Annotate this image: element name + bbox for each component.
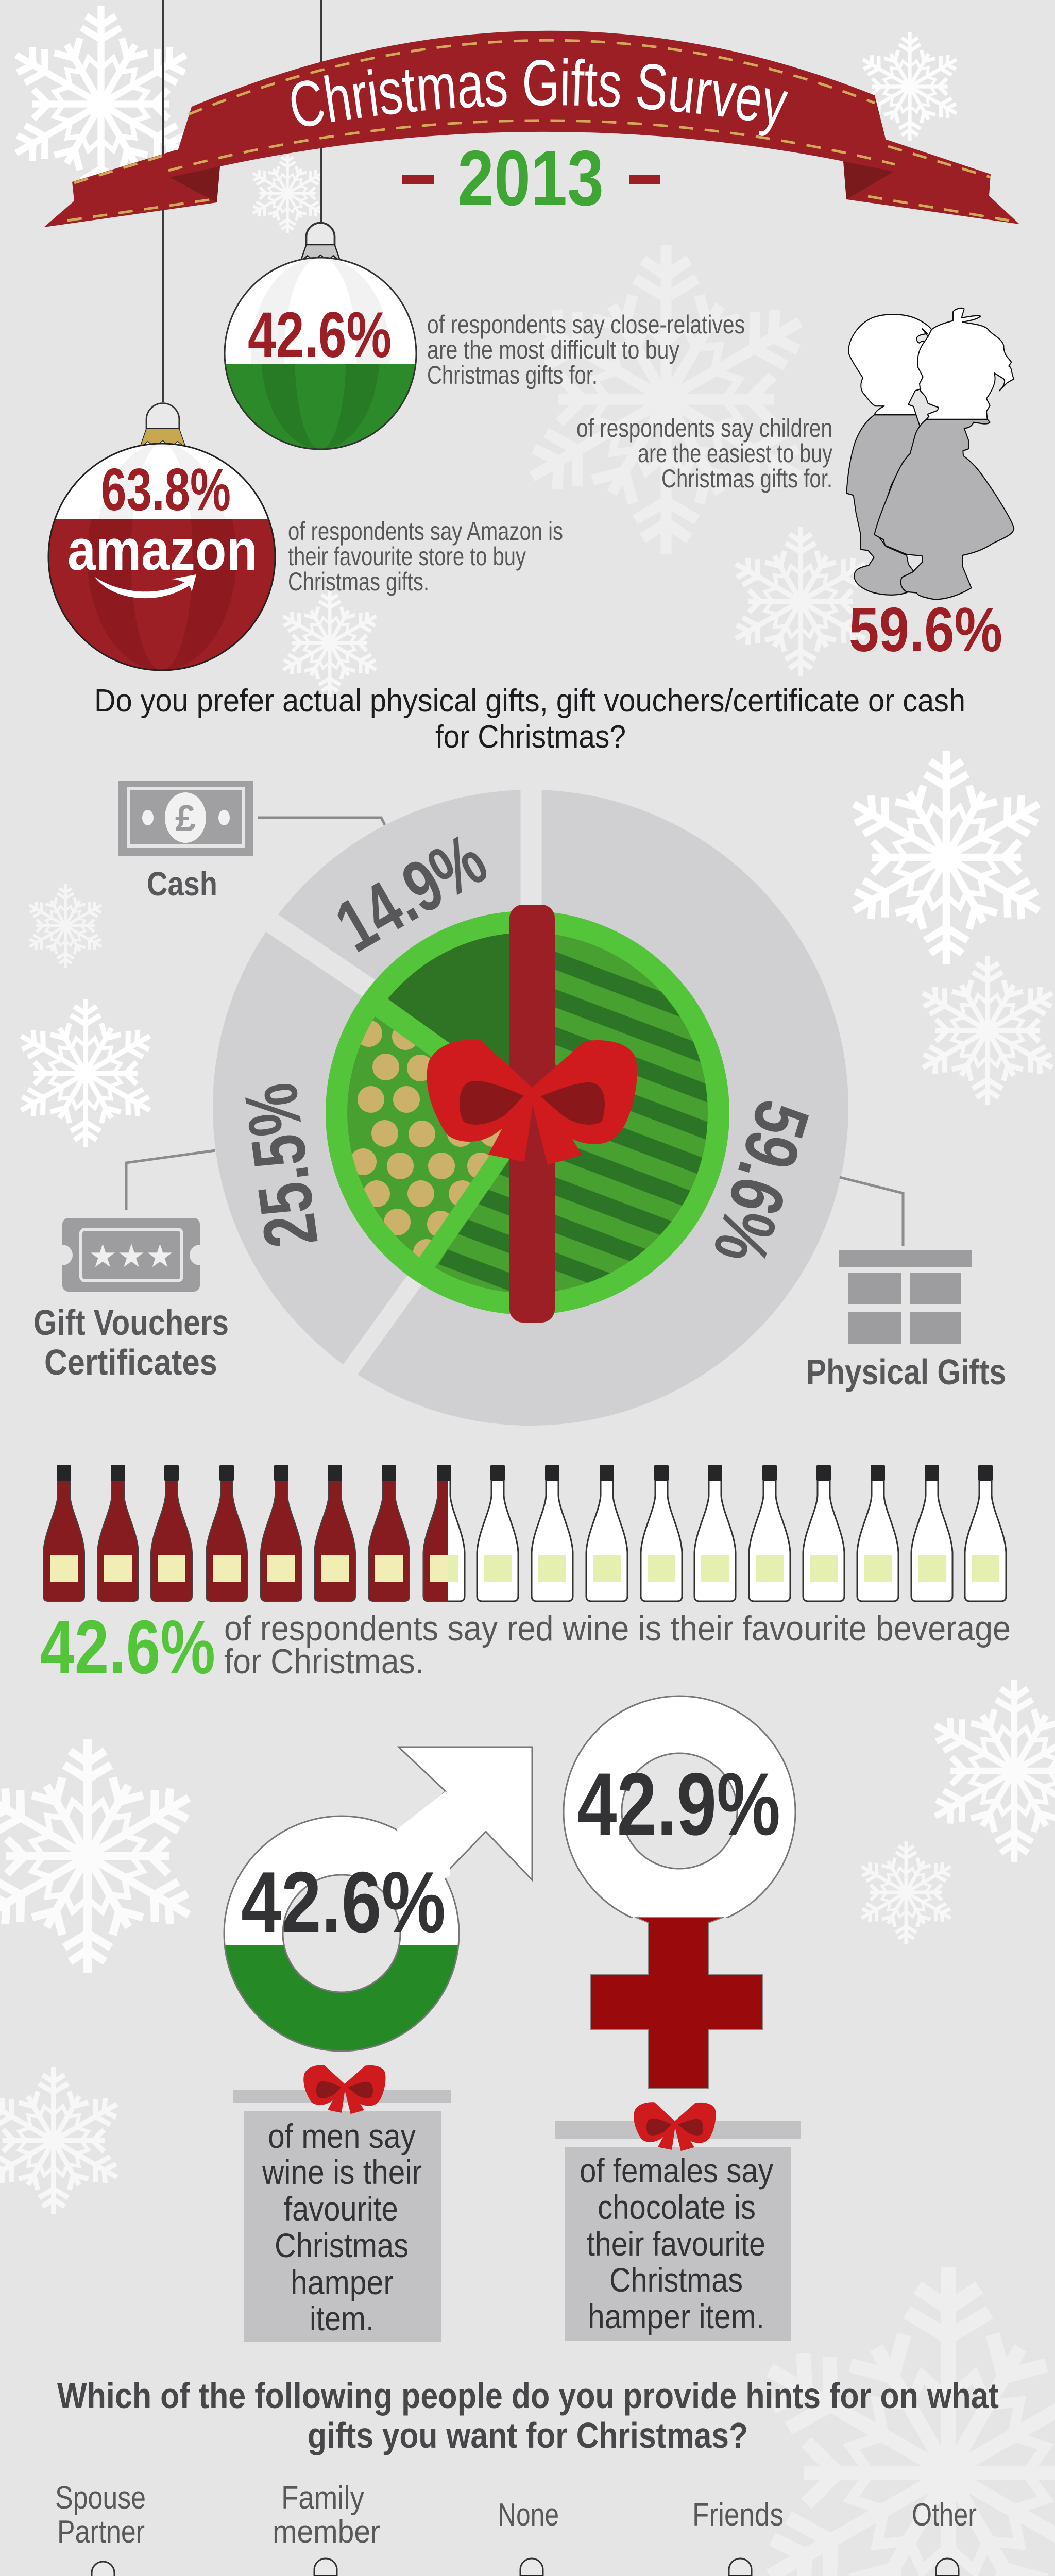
- label: physical gifts: Physical Gifts: [806, 1352, 1006, 1392]
- pie label: 59.6%: 59.6%: [697, 1092, 826, 1273]
- text: children: [576, 414, 832, 493]
- text: close relatives: Christmas gifts for.: [427, 361, 598, 389]
- question: gift preference: Do you prefer actual physical gifts, gift vouchers/certificate or cash: [94, 683, 965, 719]
- stat: red wine 42.6%: 42.6%: [40, 1605, 215, 1690]
- hamper card: females: their favourite: [587, 2225, 765, 2263]
- ornament: friends 10.6%: [667, 2497, 811, 2576]
- ornament: amazon 63.8%: 63.8%: [101, 456, 231, 523]
- hamper card: men: wine is their: [262, 2153, 422, 2191]
- pie label: 25.5%: 25.5%: [228, 1078, 334, 1252]
- hamper card: men: hamper: [291, 2263, 394, 2301]
- ornament: none 21.3%: None: [498, 2497, 559, 2533]
- pictogram: wine bottles: [43, 1465, 1006, 1601]
- hamper card: men: favourite: [284, 2190, 398, 2228]
- icon: gift voucher: [52, 1150, 215, 1292]
- icon: gift voucher: ★★★: [89, 1237, 174, 1275]
- ornament: family member 25.5%: [252, 2480, 396, 2576]
- hamper card: men: item.: [310, 2299, 374, 2337]
- hamper card: females: chocolate is: [598, 2188, 756, 2226]
- text: close relatives: are the most difficult to buy: [427, 335, 679, 364]
- hamper card: females: of females say: [580, 2151, 773, 2190]
- question: hints: [57, 2376, 999, 2455]
- ornament: other 4.3%: [875, 2497, 1019, 2576]
- question: hints: gifts you want for Christmas?: [308, 2415, 748, 2455]
- ornament: close relatives 42.6%: [225, 223, 416, 449]
- hamper card: men: Christmas: [275, 2226, 409, 2264]
- title banner: [44, 31, 1019, 227]
- female symbol chart: [564, 1696, 795, 2089]
- text: red wine: of respondents say red wine is their favourite beverage: [224, 1609, 1011, 1648]
- label: cash: Cash: [147, 865, 217, 903]
- ornament: family member 25.5%: Family: [281, 2480, 364, 2516]
- label: gift vouchers: [33, 1302, 229, 1382]
- hamper card: men: of men say: [268, 2117, 416, 2155]
- hamper card: females: [555, 2102, 801, 2341]
- text: red wine: [224, 1609, 1011, 1681]
- gift illustration: [326, 905, 729, 1323]
- ornament: spouse partner 38.3%: [32, 2480, 176, 2576]
- text: children: Christmas gifts for.: [661, 464, 832, 493]
- ornament: spouse partner 38.3%: Spouse: [55, 2480, 146, 2516]
- year heading: [402, 134, 660, 222]
- male symbol chart: [224, 1747, 532, 2051]
- icon: cash: £: [175, 798, 196, 839]
- ornament: none 21.3%: [460, 2497, 604, 2576]
- hamper card: females: Christmas: [609, 2261, 743, 2299]
- text: amazon: [288, 517, 563, 596]
- text: amazon: their favourite store to buy: [288, 542, 526, 571]
- ornament: family member 25.5%: member: [273, 2514, 380, 2550]
- chart: gift preference pie: [213, 773, 848, 1426]
- icon: physical gift: [839, 1177, 972, 1344]
- question: gift preference: [94, 683, 965, 755]
- icon: two children: [846, 308, 1014, 599]
- ornament: spouse partner 38.3%: Partner: [57, 2514, 145, 2550]
- text: close relatives: [427, 310, 745, 389]
- pie label: 14.9%: 14.9%: [322, 818, 500, 968]
- title text: Christmas Gifts Survey: [292, 58, 788, 136]
- ornament: other 4.3%: Other: [912, 2497, 977, 2533]
- hanging strings: [163, 0, 321, 402]
- text: amazon: Christmas gifts.: [288, 567, 429, 596]
- hamper card: females: hamper item.: [588, 2297, 764, 2335]
- text: children: of respondents say children: [576, 414, 832, 443]
- text: close relatives: of respondents say close-relatives: [427, 310, 745, 339]
- label: gift vouchers: Certificates: [44, 1342, 217, 1382]
- ornament: friends 10.6%: Friends: [692, 2497, 784, 2533]
- year heading: 2013: [457, 134, 604, 222]
- text: children: are the easiest to buy: [638, 439, 832, 468]
- hamper card: men: [233, 2065, 451, 2342]
- stat: children 59.6%: 59.6%: [849, 595, 1002, 665]
- ornament: close relatives 42.6%: 42.6%: [248, 299, 392, 371]
- question: gift preference: for Christmas?: [435, 719, 626, 755]
- ornament: amazon 63.8%: [48, 403, 275, 670]
- male symbol chart: 42.6%: [241, 1854, 446, 1951]
- text: red wine: for Christmas.: [224, 1642, 424, 1681]
- text: amazon: of respondents say Amazon is: [288, 517, 563, 546]
- ornament: amazon 63.8%: amazon: [67, 518, 258, 582]
- female symbol chart: 42.9%: [577, 1755, 780, 1854]
- icon: cash: [118, 781, 385, 856]
- label: gift vouchers: Gift Vouchers: [33, 1302, 229, 1343]
